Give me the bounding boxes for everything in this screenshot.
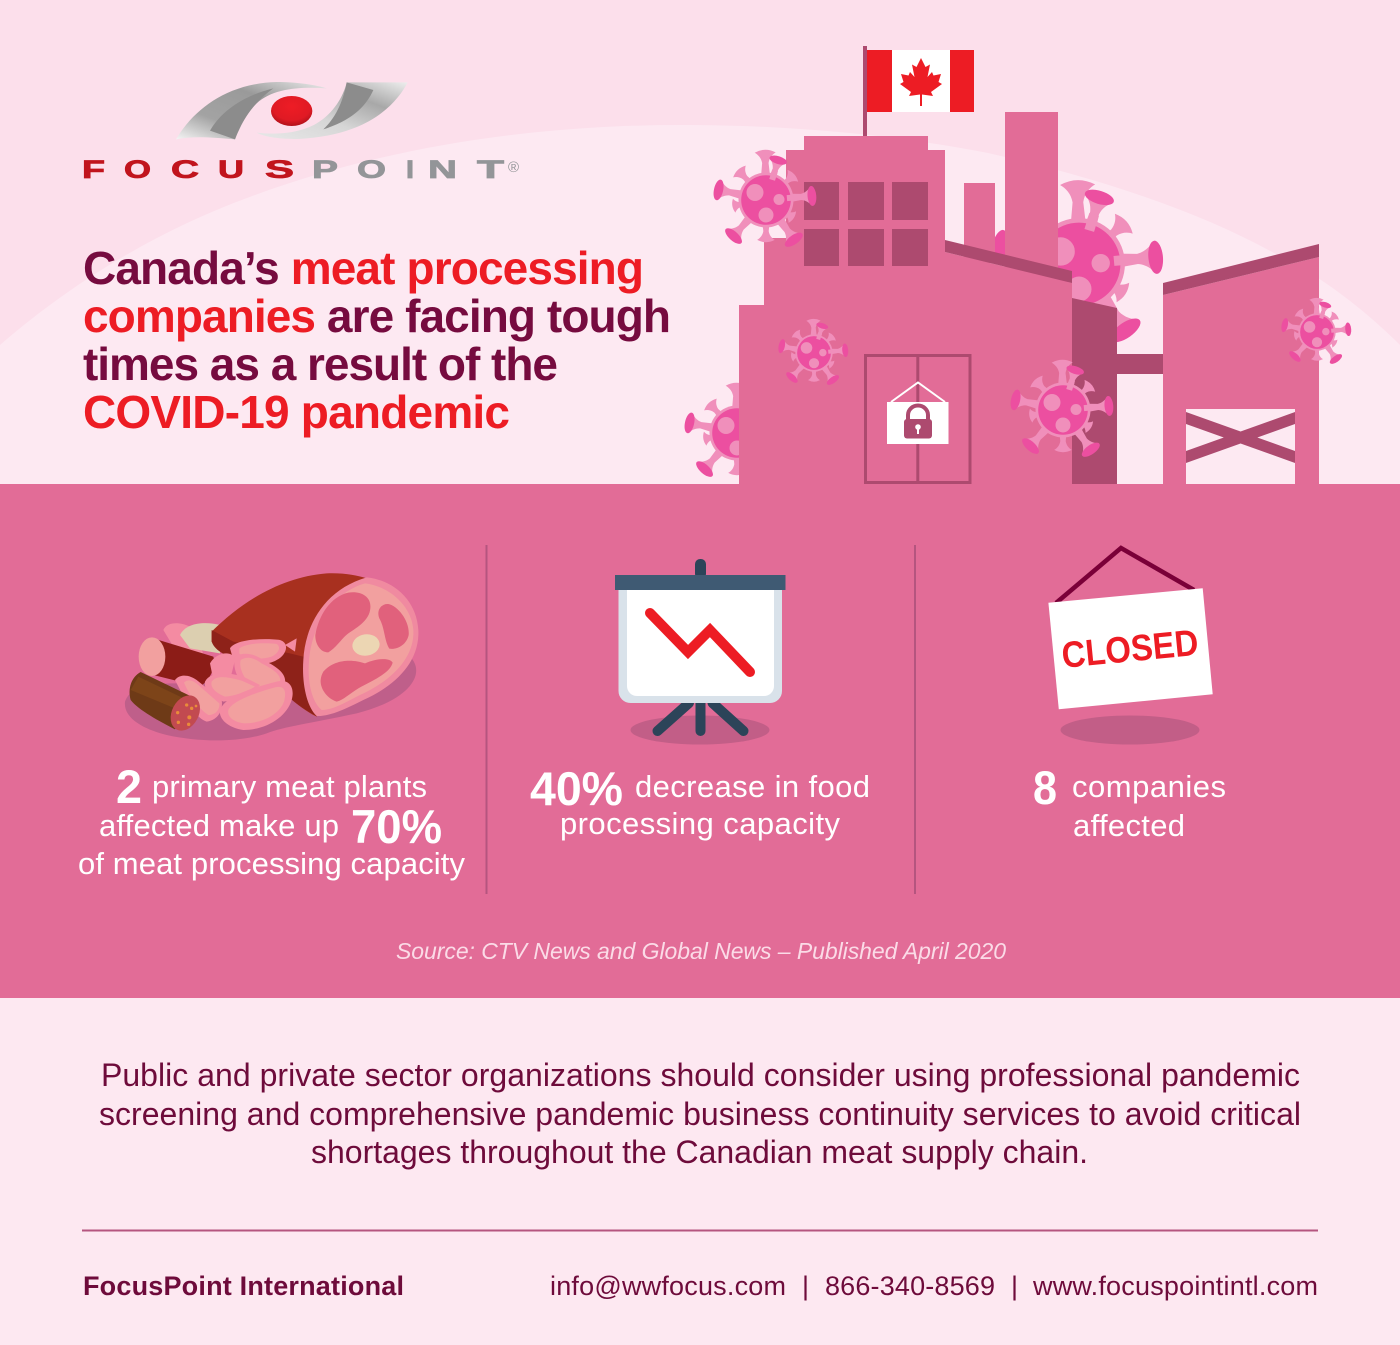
windows: [804, 182, 928, 266]
footer: contact details: |: [1011, 1271, 1018, 1301]
stat 1 text: 2: [116, 760, 142, 813]
logo wordmark: N: [428, 156, 457, 184]
right building: [1163, 257, 1319, 484]
icon: closed sign: [1048, 548, 1213, 744]
virus: upper left on tower: [712, 150, 817, 250]
flag pole: [863, 46, 867, 136]
boarded opening: [1186, 409, 1295, 484]
logo mark: [176, 82, 408, 139]
footer: contact details: [550, 1271, 1318, 1301]
lock sign: [887, 382, 948, 444]
icon: declining chart on easel: [615, 559, 786, 744]
footer: contact details: 866-340-8569: [825, 1271, 995, 1301]
recommendation paragraph: screening and comprehensive pandemic business continuity services to avoid critical: [99, 1096, 1301, 1132]
stat 1 text: primary meat plants: [152, 769, 427, 804]
logo wordmark: C: [171, 156, 199, 184]
recommendation paragraph: shortages throughout the Canadian meat supply chain.: [311, 1134, 1088, 1170]
recommendation paragraph: Public and private sector organizations should consider using professional pandemic: [101, 1057, 1300, 1093]
chimneys: [964, 112, 1058, 282]
source note: Source: CTV News and Global News – Published April 2020: [396, 938, 1006, 964]
stat 2 text: processing capacity: [560, 806, 840, 841]
title: COVID-19 pandemic: [83, 386, 510, 438]
registered mark: ®: [508, 159, 519, 176]
logo wordmark: F: [82, 156, 105, 184]
stat 3 text: affected: [1073, 808, 1185, 843]
background: upper pink panel: [0, 0, 1400, 484]
logo wordmark: P: [312, 156, 338, 184]
building side wall: [1072, 298, 1117, 484]
logo wordmark: I: [406, 156, 414, 184]
footer: contact details: |: [802, 1271, 809, 1301]
icon: meat: [125, 573, 418, 740]
logo wordmark: [82, 156, 504, 184]
virus: large behind factory: [989, 180, 1164, 347]
connector: [1117, 354, 1163, 374]
title: companies are facing tough: [83, 290, 671, 342]
stat 1 text: [78, 760, 466, 881]
footer: contact details: www.focuspointintl.com: [1032, 1271, 1318, 1301]
background: light hill curve: [0, 125, 1400, 484]
logo wordmark: T: [477, 156, 504, 184]
stat 2 text: [530, 762, 870, 841]
title: times as a result of the: [83, 338, 558, 390]
stat 1 text: affected make up: [99, 808, 339, 843]
stat 2 text: decrease in food: [635, 769, 870, 804]
lower panel: [0, 998, 1400, 1345]
logo wordmark: S: [265, 156, 294, 184]
factory illustration: [739, 46, 1319, 484]
logo wordmark: O: [357, 156, 386, 184]
logo wordmark: O: [124, 156, 151, 184]
footer: company name: FocusPoint International: [83, 1271, 404, 1301]
stats band: [0, 484, 1400, 998]
main roof band: [945, 240, 1072, 283]
title: Canada’s meat processing: [83, 242, 644, 294]
stat 3 text: [1033, 761, 1226, 843]
stat 1 text: of meat processing capacity: [78, 846, 466, 881]
footer: contact details: info@wwfocus.com: [550, 1271, 786, 1301]
virus: on right building: [1280, 298, 1352, 366]
right roof band: [1163, 244, 1319, 295]
virus: left behind factory: [683, 383, 788, 483]
icon: closed sign: CLOSED: [1060, 622, 1200, 676]
stat 3 text: 8: [1033, 761, 1057, 814]
recommendation paragraph: [99, 1057, 1301, 1170]
main building: [739, 136, 1072, 484]
stat 1 text: 70%: [351, 800, 442, 853]
logo wordmark: U: [218, 156, 244, 184]
stat 2 text: 40%: [530, 762, 623, 815]
virus: by side wall: [1009, 360, 1114, 460]
Canadian flag: [867, 50, 974, 112]
stat 3 text: companies: [1072, 769, 1226, 804]
door: [866, 355, 970, 484]
virus: on main wall: [777, 319, 849, 387]
logo: FocusPoint: [82, 82, 519, 184]
divider right: [914, 545, 916, 894]
divider left: [486, 545, 488, 894]
